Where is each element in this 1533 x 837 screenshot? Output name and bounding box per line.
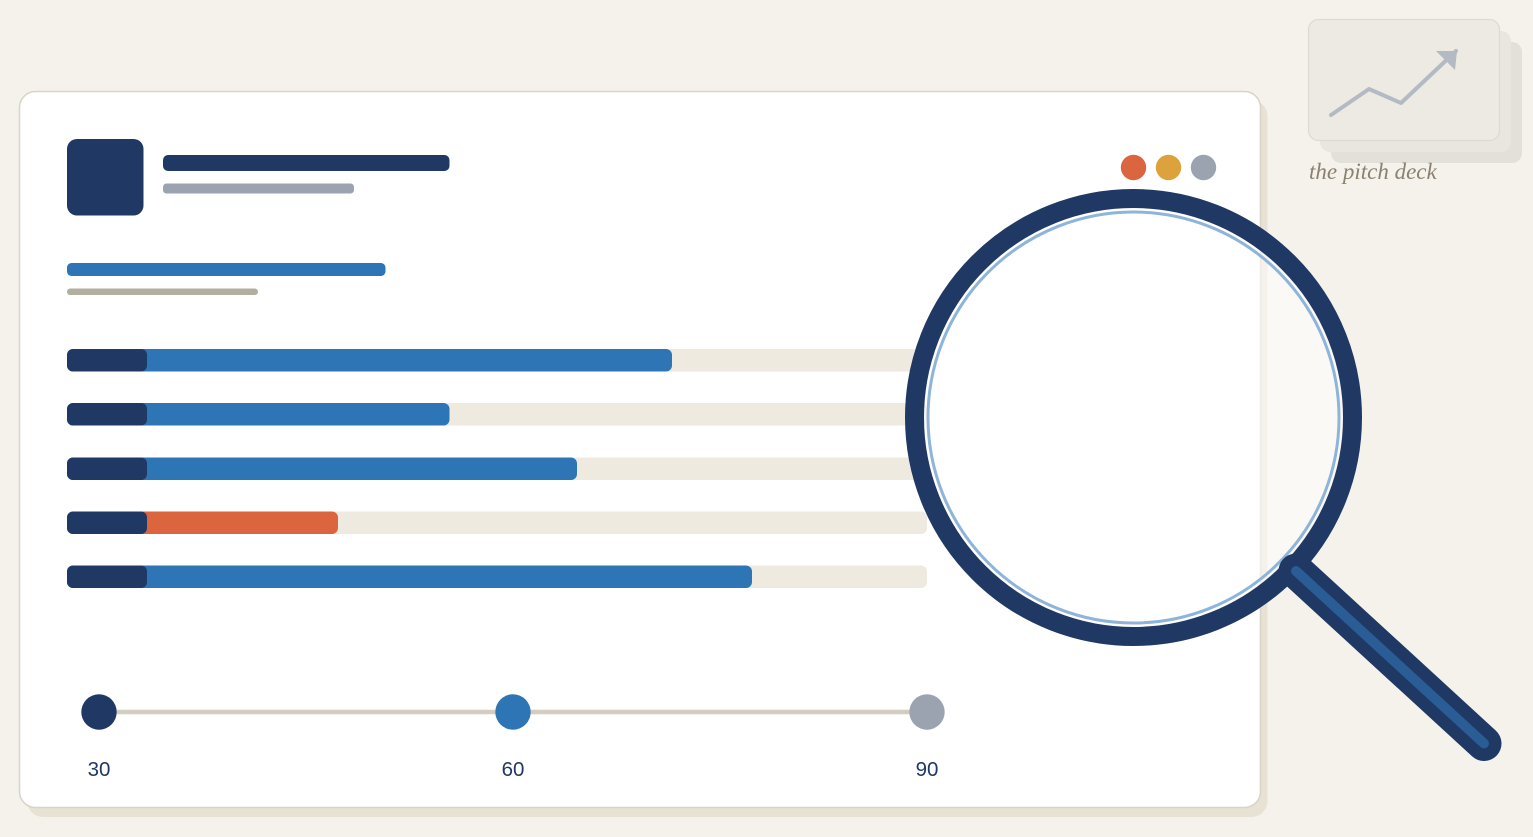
bar row 3 (67, 458, 927, 480)
bar row 4 (67, 512, 927, 534)
timeline: 30 (88, 758, 110, 781)
pitch deck stack (1308, 20, 1522, 163)
subheading placeholder (163, 184, 354, 194)
magnifier handle (1296, 571, 1484, 744)
heading placeholder (163, 155, 450, 171)
timeline: 60 (502, 758, 524, 781)
icon: magnifying glass (914, 198, 1484, 744)
timeline (81, 694, 945, 781)
icon: rising trend arrow (1331, 51, 1457, 115)
panel: document card (20, 92, 1268, 817)
section subtitle placeholder (67, 288, 258, 295)
magnifier lens (914, 198, 1352, 636)
timeline: 90 (916, 758, 938, 781)
bar row 5 (67, 566, 927, 588)
section title placeholder (67, 263, 386, 276)
bar chart (67, 349, 927, 588)
status dots (1121, 155, 1216, 180)
bar row 2 (67, 403, 927, 426)
icon: logo square (67, 139, 144, 216)
caption: the pitch deck: the pitch deck (1309, 159, 1438, 184)
bar row 1 (67, 349, 927, 372)
